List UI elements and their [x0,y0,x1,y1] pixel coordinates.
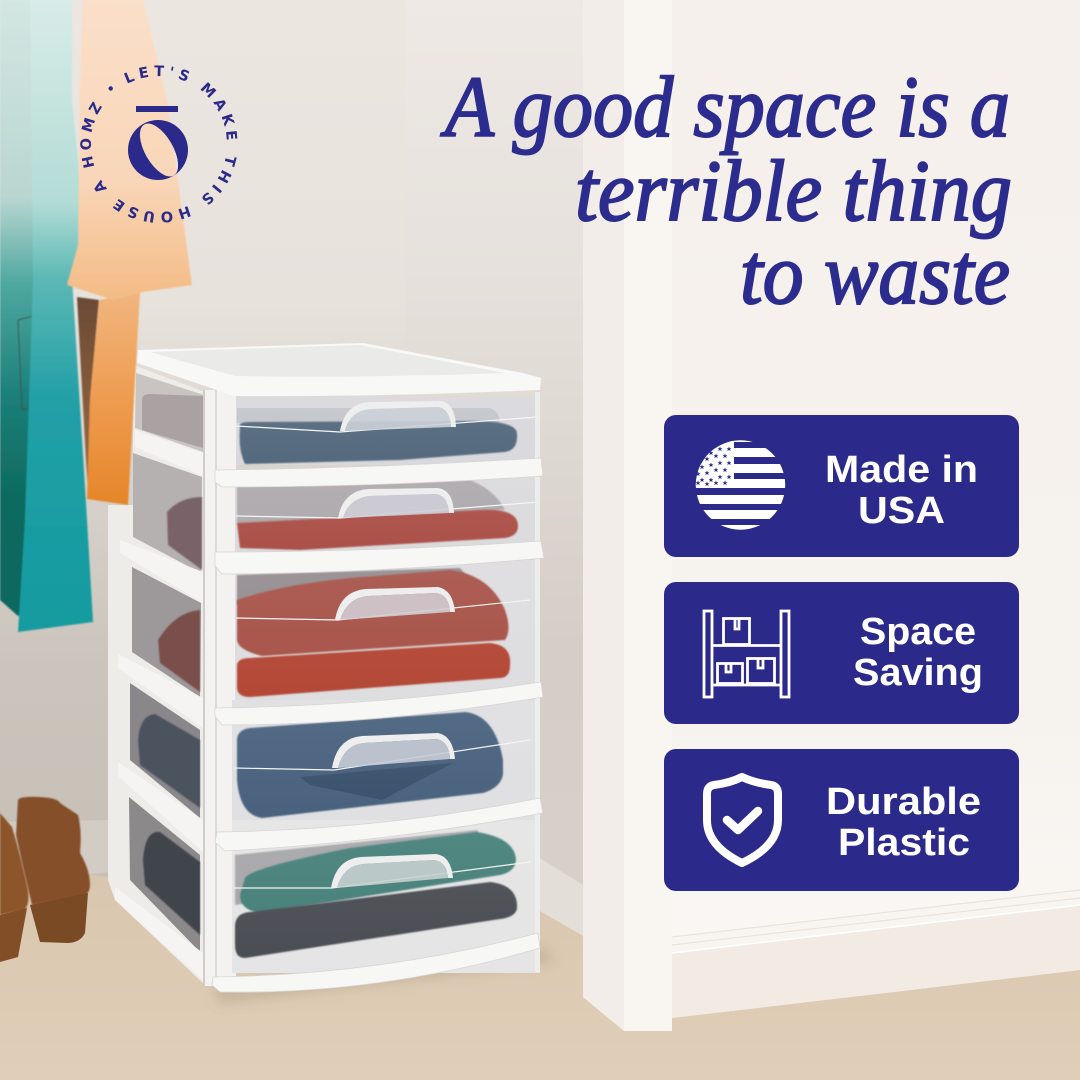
front right frame edge [535,392,540,972]
label: Durable Plastic [826,781,981,864]
pillar corner [583,0,672,1031]
ring dot [108,86,113,91]
headline: to waste [740,225,1010,322]
left boot [0,813,28,915]
logo O mark [128,120,188,180]
panel: Durable Plastic [664,749,1019,891]
icon: shelf with boxes [704,611,789,697]
drawer 4: denim jeans [232,700,540,830]
label: Space Saving: Saving [853,652,983,694]
label: Space Saving: Space [860,611,976,653]
handle [338,488,454,518]
ankle boots [0,797,90,962]
headline: terrible thing [575,142,1012,239]
side panel windows [129,373,204,952]
left wall baseboard [0,820,110,884]
right boot [16,797,90,905]
hanging teal dress [0,0,93,632]
circular brand logo [80,65,238,223]
label: Space Saving [853,611,983,694]
handle [335,587,455,620]
front frame post [203,390,236,986]
label: Made in USA: USA [858,490,945,532]
hanging orange shirt [67,0,192,505]
floor carpet [0,872,1080,1080]
logo ring text: LET'S MAKE THIS HOUSE A HOMZ [80,65,238,223]
handle [331,854,453,888]
side rails [115,430,203,980]
label: Durable Plastic: Plastic [838,822,970,864]
drawer 1: blue folded clothes [236,397,540,465]
drawer 5: teal and dark clothes [232,820,540,973]
chest shadow [212,945,556,1004]
top lid [137,343,541,396]
drawer 2: red folded clothes [235,476,540,555]
front bars [212,458,544,992]
panel: Space Saving [664,582,1019,724]
label: Durable Plastic: Durable [826,781,981,823]
handle [340,401,456,431]
headline [440,58,1012,322]
icon: US flag globe [696,440,786,530]
handle [332,733,455,768]
headline: A good space is a [440,58,1010,155]
right wall baseboard [672,890,1080,1018]
label: Made in USA [825,449,978,532]
icon: shield with check [707,777,778,863]
panel: Made in USA [664,415,1019,557]
chest side frame [108,365,205,985]
storage drawer chest [108,343,544,992]
label: Made in USA: Made in [825,449,978,491]
logo macron bar [136,106,178,112]
drawer 3: large red folded clothes [235,560,540,705]
corner baseboard [538,857,583,936]
